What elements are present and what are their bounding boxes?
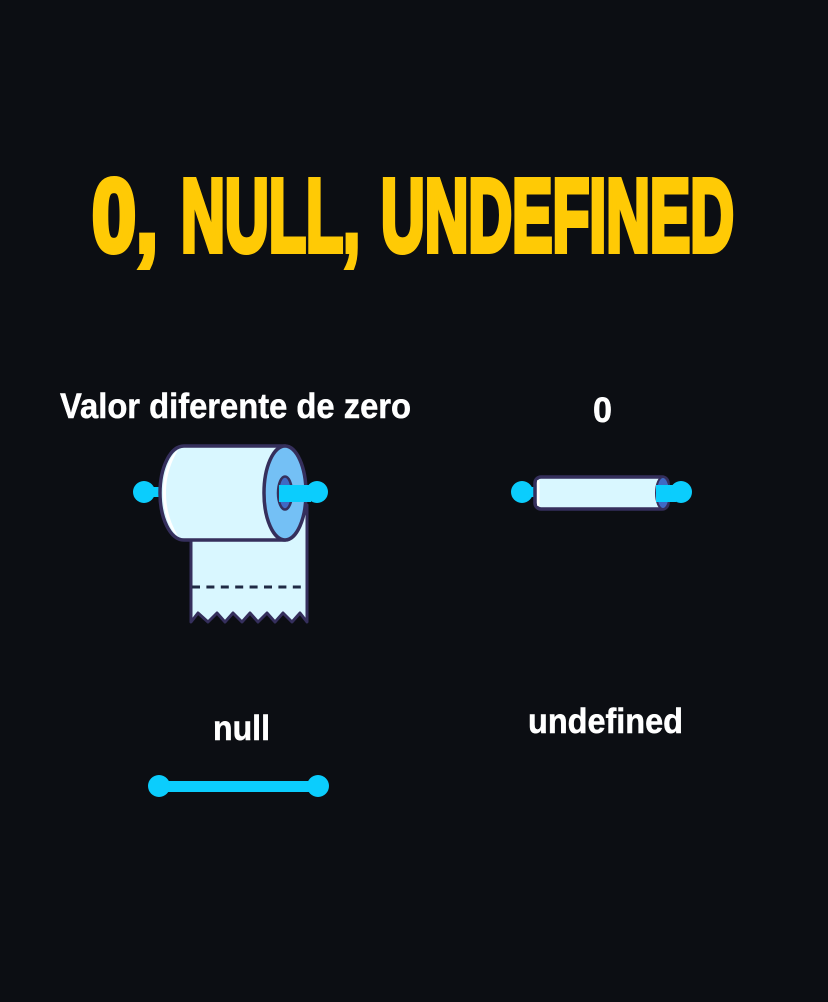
icon: bare holder — [148, 775, 329, 797]
title — [92, 158, 734, 273]
icon: full toilet paper roll — [133, 446, 328, 622]
roll body — [160, 446, 284, 540]
hanging paper sheet — [191, 505, 307, 622]
title: NULL, — [181, 158, 360, 273]
holder left knob — [133, 481, 162, 503]
title: 0, — [92, 158, 158, 273]
left knob — [511, 481, 536, 503]
roll left highlight — [163, 450, 178, 536]
cardboard hole — [278, 476, 292, 510]
label: undefined: undefined — [528, 702, 683, 741]
thin roll body — [535, 477, 668, 509]
pin and right knob — [656, 481, 692, 503]
roll end — [264, 446, 306, 540]
roll left highlight — [537, 480, 540, 506]
label: null: null — [213, 709, 270, 748]
perforation line — [192, 586, 306, 588]
label: valor diferente de zero: Valor diferente de zero — [60, 387, 411, 426]
icon: empty roll — [511, 477, 692, 509]
roll end — [656, 477, 670, 509]
holder pin and right knob — [279, 481, 328, 503]
label: 0: 0 — [593, 391, 612, 430]
